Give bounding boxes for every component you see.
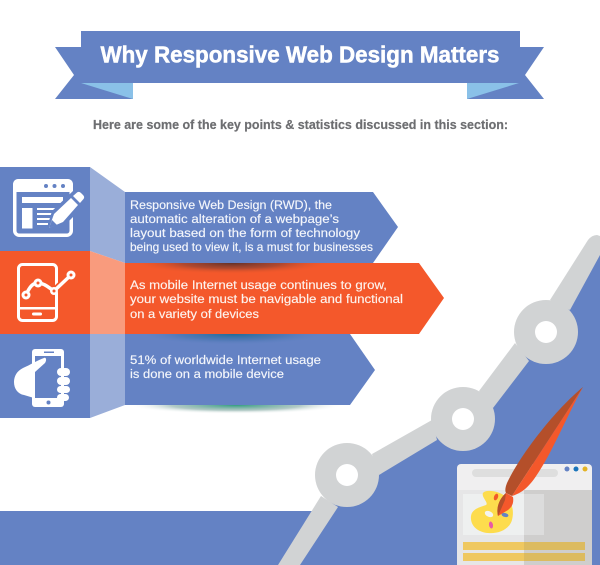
description text bbox=[130, 198, 373, 254]
description text bbox=[130, 278, 403, 321]
description text: being used to view it, is a must for businesses bbox=[130, 240, 373, 254]
browser window bbox=[457, 464, 592, 565]
description text: layout based on the form of technology bbox=[130, 226, 361, 240]
blue background shape bbox=[0, 245, 600, 565]
shadow bbox=[149, 263, 316, 272]
description text: automatic alteration of a webpage’s bbox=[130, 212, 339, 226]
description text: your website must be navigable and functional bbox=[130, 292, 403, 306]
shadow bbox=[142, 405, 330, 413]
subtitle: Here are some of the key points & statistics discussed in this section: bbox=[93, 117, 508, 132]
shadow bbox=[165, 334, 301, 342]
icon: paintbrush bbox=[497, 387, 583, 516]
illustration: browser window with palette and brush bbox=[457, 387, 592, 565]
icon: hand holding phone bbox=[14, 349, 70, 407]
description text: on a variety of devices bbox=[130, 307, 259, 321]
description text bbox=[130, 353, 321, 381]
panel: mobile usage growth bbox=[0, 251, 444, 334]
rising line chart bbox=[278, 235, 600, 565]
panel: mobile share statistic bbox=[0, 334, 375, 418]
description text: As mobile Internet usage continues to grow, bbox=[130, 278, 387, 292]
title ribbon bbox=[55, 31, 544, 99]
icon: tablet with chart bbox=[18, 264, 76, 320]
icon: browser and pencil bbox=[13, 179, 86, 235]
title: Why Responsive Web Design Matters bbox=[100, 42, 500, 68]
description text: 51% of worldwide Internet usage bbox=[130, 353, 321, 367]
description text: Responsive Web Design (RWD), the bbox=[130, 198, 332, 212]
description text: is done on a mobile device bbox=[130, 367, 284, 381]
icon: palette bbox=[471, 491, 513, 533]
panel: RWD definition bbox=[0, 167, 398, 263]
